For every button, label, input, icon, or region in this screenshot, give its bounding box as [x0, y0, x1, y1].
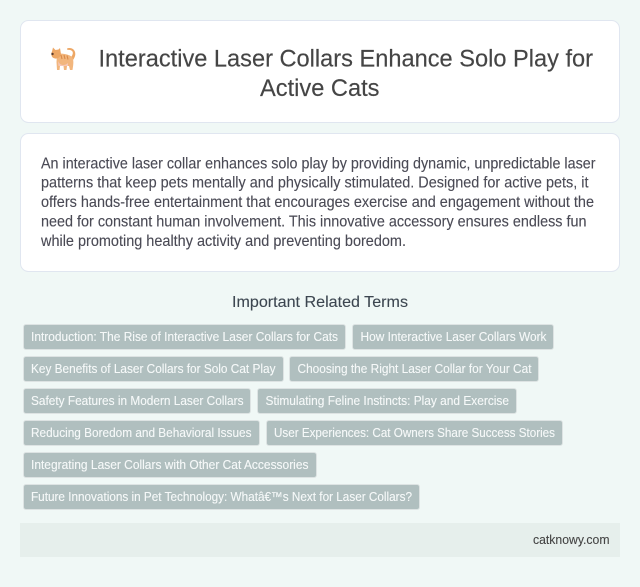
- text block: description: [40, 156, 596, 250]
- heading: related terms: Important Related Terms: [232, 294, 408, 311]
- text block: description: An interactive laser collar enhances solo play by providing dynamic, unpredictable laser: [41, 156, 596, 172]
- panel: description: [20, 134, 620, 272]
- title: Interactive Laser Collars Enhance Solo Play for: [98, 46, 593, 72]
- title: Active Cats: [260, 75, 380, 102]
- tag: key benefits: [24, 356, 284, 382]
- tag: user experiences: [266, 420, 562, 446]
- tag: instincts: [258, 388, 516, 414]
- tag: integrating: [24, 452, 316, 478]
- tag: integrating: Integrating Laser Collars with Other Cat Accessories: [31, 458, 308, 472]
- tag: instincts: Stimulating Feline Instincts: Play and Exercise: [266, 394, 509, 408]
- tag: safety: Safety Features in Modern Laser Collars: [31, 394, 244, 408]
- tag: boredom: Reducing Boredom and Behavioral Issues: [31, 426, 252, 440]
- icon: cat: [51, 48, 75, 70]
- text block: description: while promoting healthy activity and preventing boredom.: [40, 233, 406, 250]
- tag: choosing: Choosing the Right Laser Collar for Your Cat: [298, 362, 532, 376]
- tag: future innovations: [24, 484, 420, 510]
- tag: boredom: [24, 420, 260, 446]
- footer: [20, 523, 620, 557]
- text block: description: need for constant human involvement. This innovative accessory ensures endless fun: [41, 214, 586, 230]
- tag: user experiences: User Experiences: Cat Owners Share Success Stories: [274, 426, 555, 440]
- title: [98, 46, 593, 102]
- tag: introduction: [24, 324, 346, 350]
- text block: description: patterns that keep pets mentally and physically stimulated. Designed for active pets, it: [41, 174, 589, 192]
- tag: how it works: [352, 324, 554, 350]
- text block: description: offers hands-free entertainment that encourages exercise and engagement without the: [41, 194, 594, 211]
- tag: safety: [24, 388, 250, 414]
- tag: key benefits: Key Benefits of Laser Collars for Solo Cat Play: [31, 362, 276, 376]
- tag: how it works: How Interactive Laser Collars Work: [360, 330, 547, 344]
- tag: future innovations: Future Innovations in Pet Technology: Whatâ€™s Next for Laser Collars?: [31, 490, 412, 504]
- footer source: catknowy.com: [533, 532, 610, 547]
- related terms tags: [24, 324, 562, 510]
- tag: choosing: [290, 356, 538, 382]
- tag: introduction: Introduction: The Rise of Interactive Laser Collars for Cats: [31, 330, 338, 344]
- panel: header: [20, 20, 620, 122]
